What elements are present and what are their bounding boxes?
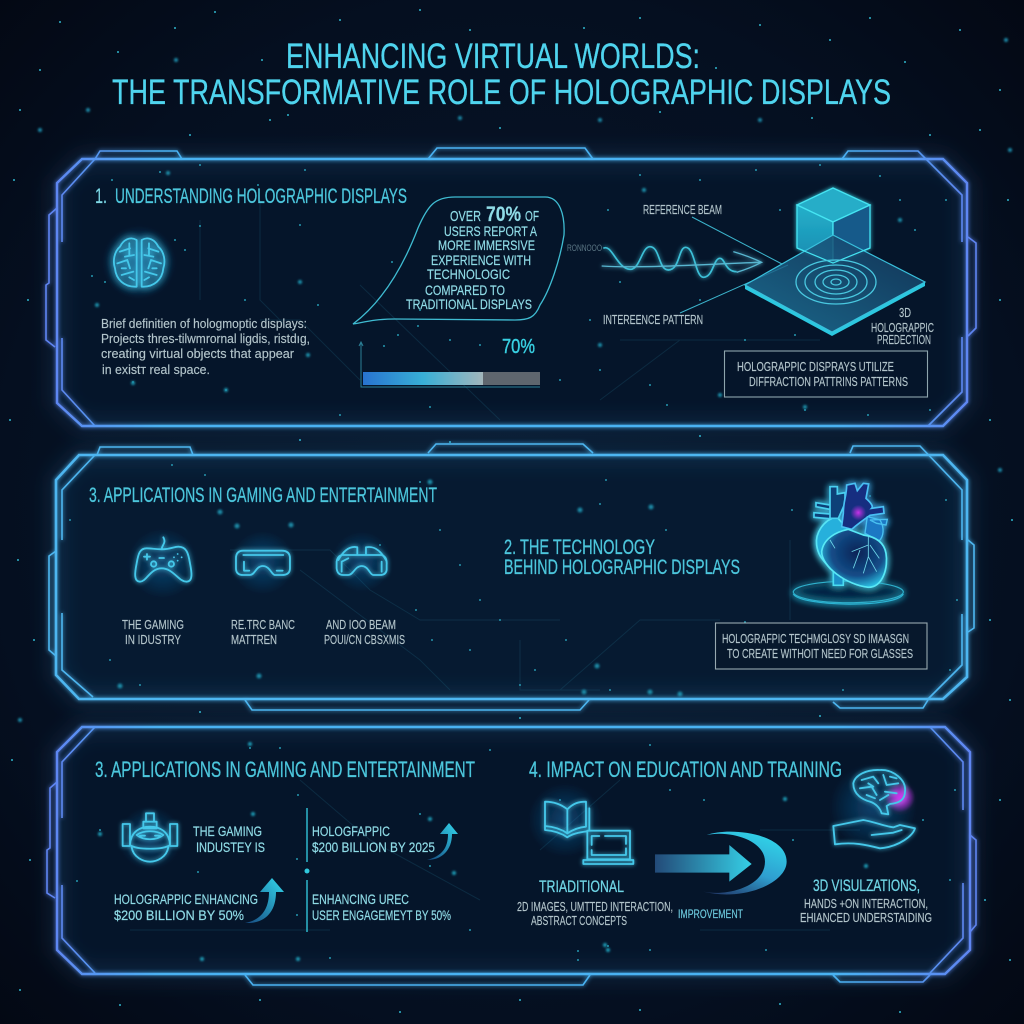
panel 1 frame <box>46 148 976 426</box>
stat text: holographic enhancing: $200 BILLION BY 50% <box>114 907 244 923</box>
stat text: user engagement: ENHANCING UREC <box>312 891 409 907</box>
icon: holographic heart <box>793 483 903 604</box>
title <box>112 37 891 112</box>
gaming labels: MATTREN <box>231 632 277 647</box>
section heading 1: UNDERSTANDING HOLOGRAPHIC DISPLAYS <box>115 185 407 208</box>
traditional text: 2D IMAGES, UMTTED INTERACTION, <box>517 899 673 914</box>
stat text: 200 billion by 2025 <box>312 823 435 855</box>
caption box 2: HOLOGRAFPIC TECHMGLOSY SD IMAASGN <box>722 631 909 646</box>
3d visualizations text <box>800 876 932 925</box>
section heading 4: 4. IMPACT ON EDUCATION AND TRAINING <box>529 757 842 782</box>
gaming labels <box>122 617 405 647</box>
stat text: 200 billion by 2025: $200 BILLION BY 2025 <box>312 839 435 855</box>
icon: brain in hand <box>830 763 917 850</box>
stat divider <box>304 808 310 932</box>
icon: game controller <box>128 528 198 598</box>
icon: book and laptop <box>528 783 633 864</box>
caption box 1 <box>724 351 928 397</box>
gaming labels: THE GAMING <box>122 617 184 632</box>
definition text: in existт real space. <box>102 362 210 377</box>
label: reference beam: REFERENCE BEAM <box>643 202 722 217</box>
arrow: growth up 2 <box>245 878 284 923</box>
definition text: Brief definitien of hologmoptic displays: <box>101 316 307 331</box>
stat text: user engagement <box>312 891 451 923</box>
traditional text <box>517 877 673 928</box>
panel: understanding holographic displays <box>46 148 976 426</box>
panel 2 frame <box>49 444 974 710</box>
speech bubble callout: EXPERIENCE WITH <box>431 252 531 268</box>
speech bubble callout: MORE IMMERSIVE <box>438 237 535 253</box>
3d visualizations text: 3D VISULZATIONS, <box>813 876 920 895</box>
progress bar chart: 70% <box>502 336 535 358</box>
section heading 3 lower: 3. APPLICATIONS IN GAMING AND ENTERTAINMENT <box>95 757 475 782</box>
speech bubble callout: COMPARED TO <box>425 282 505 298</box>
label: 3d projection: PREDECTION <box>877 332 931 347</box>
definition text: Projects thres-tilwmrornal ligdis, ristdıg, <box>101 331 310 346</box>
big arrow: improvement <box>655 832 787 894</box>
stat text: holographic enhancing <box>114 891 258 923</box>
improvement label: IMPROVEMENT <box>678 907 743 921</box>
section heading 1: 1. <box>95 185 107 208</box>
section heading 2 <box>504 536 740 579</box>
speech bubble callout: TRADITIONAL DISPLAYS <box>406 296 532 312</box>
speech bubble callout: USERS REPORT A <box>444 223 537 239</box>
speech bubble callout: 70% <box>486 203 521 226</box>
icon: brain <box>102 226 176 299</box>
gaming labels: AND IOO BEAM <box>326 617 396 632</box>
speech bubble callout <box>353 197 564 324</box>
speech bubble callout: OVER <box>450 208 481 225</box>
gaming labels: IN IDUSTRY <box>125 632 181 647</box>
section heading 1 <box>95 185 407 208</box>
section heading 2: 2. THE TECHNOLOGY <box>504 536 655 559</box>
stat text: user engagement: USER ENGAGEMEYT BY 50% <box>312 907 451 923</box>
caption box 1: HOLOGRAPPIC DISPRAYS UTILIZE <box>737 359 894 374</box>
label: interference pattern: INTEREENCE PATTERN <box>603 312 703 327</box>
stat text: gaming industry: INDUSTEY IS <box>196 839 265 855</box>
panel: gaming and technology <box>49 444 974 710</box>
stat text: gaming industry <box>193 823 265 855</box>
title: ENHANCING VIRTUAL WORLDS: <box>286 37 700 76</box>
traditional text: ABSTRACT CONCEPTS <box>531 913 627 928</box>
panel 3 frame <box>47 727 976 985</box>
icon: ar glasses <box>332 532 392 592</box>
icon: vr helmet <box>118 807 182 870</box>
speech bubble callout: OF <box>525 208 539 225</box>
hologram plate and cube <box>745 188 934 347</box>
label: 3d projection <box>871 305 934 347</box>
caption box 2: TO CREATE WITHOIT NEED FOR GLASSES <box>727 646 913 661</box>
panel: applications and education <box>47 727 976 985</box>
icon: vr goggles <box>231 531 294 594</box>
traditional text: TRIADITIONAL <box>539 877 624 896</box>
caption box 2 <box>716 623 927 669</box>
gaming labels: POUI/CN CBSXMIS <box>324 632 405 647</box>
section heading 3 upper: 3. APPLICATIONS IN GAMING AND ENTERTAINMENT <box>89 484 437 507</box>
section heading 2: BEHIND HOLOGRAPHIC DISPLAYS <box>504 556 740 579</box>
speech bubble callout: TECHNOLOGIC <box>427 266 510 282</box>
stat text: 200 billion by 2025: HOLOGFAPPIC <box>312 823 390 839</box>
3d visualizations text: HANDS +ON INTERACTION, <box>804 896 928 911</box>
label: 3d projection: HOLOGRAPPIC <box>871 320 934 335</box>
arrow: growth up <box>427 823 458 860</box>
gaming labels: RE.TRC BANC <box>231 617 295 632</box>
wave diagram: RONNOOO <box>567 243 602 253</box>
label: 3d projection: 3D <box>899 305 911 320</box>
definition text: creating virtual objects that appear <box>101 346 295 361</box>
wave diagram <box>567 202 788 327</box>
stat text: gaming industry: THE GAMING <box>193 823 262 839</box>
caption box 1: DIFFRACTION PATTRINS PATTERNS <box>749 374 908 389</box>
progress bar chart <box>359 336 540 387</box>
stat text: holographic enhancing: HOLOGRAPPIC ENHANCING <box>114 891 258 907</box>
3d visualizations text: EHIANCED UNDERSTAIDING <box>800 910 932 925</box>
definition text <box>101 316 310 377</box>
